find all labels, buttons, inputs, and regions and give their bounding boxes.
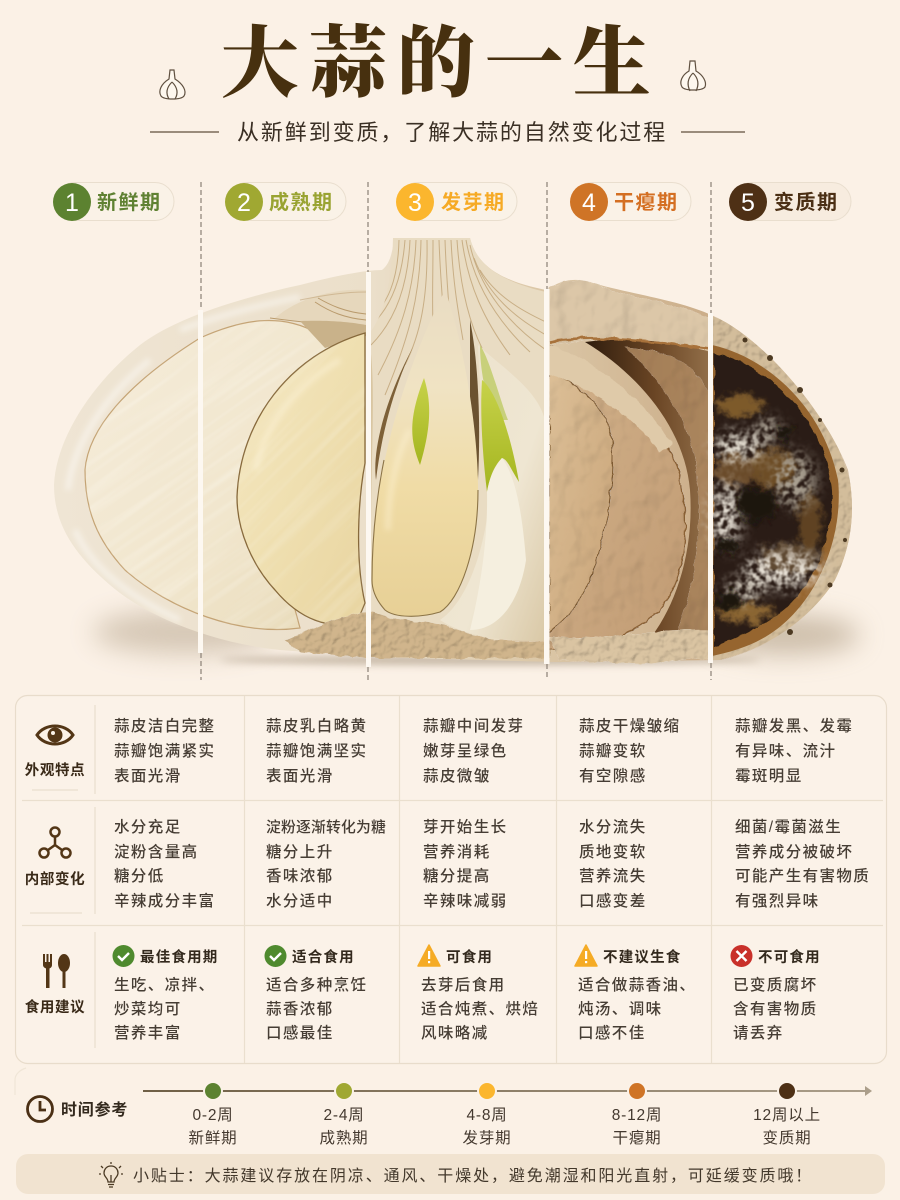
timeline label: 时间参考 xyxy=(61,1100,128,1119)
advice column 5: 含有害物质 xyxy=(733,1000,818,1018)
icon: garlic right xyxy=(681,61,706,91)
timeline point 2: 成熟期 xyxy=(320,1129,368,1147)
icon: fork and spoon xyxy=(43,954,70,988)
internal change row text: 营养成分被破坏 xyxy=(735,843,853,861)
advice column 3 xyxy=(418,945,539,1042)
timeline point 1: 0-2周 xyxy=(192,1107,234,1124)
timeline section xyxy=(15,1068,872,1147)
advice column 5: 不可食用 xyxy=(758,948,821,966)
appearance row text: 蒜皮干燥皱缩 xyxy=(579,717,680,735)
title: 大蒜的一生 xyxy=(221,20,661,107)
garlic section 2 ripe clove xyxy=(236,332,366,624)
advice column 2 xyxy=(264,945,367,1042)
internal change row text: 有强烈异味 xyxy=(735,892,820,910)
timeline point 1 xyxy=(189,1081,237,1147)
garlic outer skin xyxy=(54,238,852,662)
advice column 4: 不建议生食 xyxy=(603,948,682,966)
garlic section 5 rotten core xyxy=(713,353,832,647)
internal change row text: 水分适中 xyxy=(266,892,334,910)
stage pill 2 xyxy=(225,182,346,221)
comparison table xyxy=(16,696,886,1064)
timeline point 3 xyxy=(463,1081,511,1147)
garlic section 5 skin xyxy=(712,316,852,662)
appearance row text: 嫩芽呈绿色 xyxy=(423,742,508,760)
garlic section 1 fresh clove xyxy=(84,320,328,630)
garlic section 4 shrunken clove A xyxy=(549,372,613,632)
stage pill 4: 干瘪期 xyxy=(614,191,678,214)
advice column 1: 炒菜均可 xyxy=(114,1000,182,1018)
garlic section 4 outer band xyxy=(625,347,711,648)
stage pill 4: 4 xyxy=(582,189,596,217)
divider strip 3 xyxy=(544,289,550,664)
timeline point 2: 2-4周 xyxy=(323,1107,365,1124)
timeline point 5 xyxy=(753,1081,821,1147)
stage pill 2: 2 xyxy=(237,189,251,217)
appearance row text: 有异味、流汁 xyxy=(735,742,836,760)
advice column 1: 最佳食用期 xyxy=(140,948,218,966)
table grid xyxy=(22,696,883,1063)
appearance row text: 蒜皮洁白完整 xyxy=(114,716,215,735)
internal change row text: 淀粉逐渐转化为糖 xyxy=(266,818,386,836)
garlic section 4 ragged skin band xyxy=(549,339,711,452)
garlic base root plate xyxy=(285,612,552,658)
timeline point 5: 12周以上 xyxy=(753,1106,821,1124)
advice column 5: 请丢弃 xyxy=(733,1023,784,1042)
advice column 2: 口感最佳 xyxy=(266,1024,334,1042)
garlic section 3 sheath xyxy=(440,345,546,641)
advice column 5: 已变质腐坏 xyxy=(733,975,818,994)
appearance row text: 蒜瓣中间发芽 xyxy=(423,717,524,735)
garlic section 5 skin spots xyxy=(742,338,847,635)
internal change row text: 水分充足 xyxy=(114,818,182,836)
appearance row text: 蒜皮乳白略黄 xyxy=(266,717,367,735)
appearance row text: 蒜皮微皱 xyxy=(423,767,491,785)
internal change row text: 营养消耗 xyxy=(423,843,491,861)
sprout small xyxy=(412,378,429,465)
stage pill 3: 3 xyxy=(408,189,422,217)
stage pill 4 xyxy=(570,182,691,221)
advice column 3: 可食用 xyxy=(446,948,493,966)
appearance row text: 蒜瓣饱满坚实 xyxy=(266,741,367,760)
timeline point 2 xyxy=(320,1081,368,1147)
internal change row text: 质地变软 xyxy=(579,842,647,861)
advice column 3: 去芽后食用 xyxy=(421,975,506,994)
stage pill 5: 5 xyxy=(741,189,755,217)
row label: internal change: 内部变化 xyxy=(25,870,85,888)
garlic section 4 shrunken clove B xyxy=(549,345,686,650)
internal change row text: 口感变差 xyxy=(579,891,647,910)
advice column 2: 适合多种烹饪 xyxy=(266,975,367,994)
timeline point 4: 8-12周 xyxy=(612,1107,662,1124)
row label: appearance: 外观特点 xyxy=(25,761,85,779)
garlic clove seam xyxy=(300,321,366,348)
appearance row text: 蒜瓣饱满紧实 xyxy=(114,741,215,760)
internal change row text: 辛辣成分丰富 xyxy=(114,891,215,910)
stage pill 5 xyxy=(729,182,851,221)
advice column 4: 适合做蒜香油、 xyxy=(578,976,696,994)
tip text: 小贴士：大蒜建议存放在阴凉、通风、干燥处，避免潮湿和阳光直射，可延缓变质哦！ xyxy=(133,1167,813,1185)
timeline point 1: 新鲜期 xyxy=(189,1129,237,1147)
internal change row text: 糖分提高 xyxy=(423,867,491,885)
divider strip 1 xyxy=(198,310,203,653)
row label: eating advice: 食用建议 xyxy=(25,998,85,1016)
appearance row text: 蒜瓣发黑、发霉 xyxy=(735,717,853,735)
garlic neck fibres xyxy=(368,238,546,640)
garlic section 4 dark cavity xyxy=(585,340,711,650)
internal change row text: 可能产生有害物质 xyxy=(735,867,870,885)
appearance row text: 表面光滑 xyxy=(114,767,182,785)
garlic cross-section illustration xyxy=(0,135,860,776)
timeline point 4 xyxy=(612,1081,662,1147)
garlic section 4 base fringe xyxy=(549,630,711,664)
advice column 4: 口感不佳 xyxy=(578,1024,646,1042)
advice column 1 xyxy=(112,945,218,1042)
icon: light bulb xyxy=(99,1162,123,1187)
internal change row text: 糖分低 xyxy=(114,867,165,885)
garlic section 3 clove xyxy=(372,290,478,616)
advice column 2: 蒜香浓郁 xyxy=(266,1000,334,1018)
appearance row text: 有空隙感 xyxy=(579,766,647,785)
stage pill 2: 成熟期 xyxy=(269,190,334,214)
appearance row text: 蒜瓣变软 xyxy=(579,741,647,760)
internal change row text: 细菌/霉菌滋生 xyxy=(735,818,842,836)
stage pill 3: 发芽期 xyxy=(441,191,506,214)
stage pill 1: 1 xyxy=(65,189,79,217)
stage pill 5: 变质期 xyxy=(774,190,838,214)
advice column 1: 营养丰富 xyxy=(114,1024,182,1042)
internal change row text: 辛辣味减弱 xyxy=(423,891,508,910)
timeline point 3: 4-8周 xyxy=(466,1107,508,1124)
appearance row text: 霉斑明显 xyxy=(735,767,803,785)
stage dashed dividers xyxy=(201,182,711,680)
divider strip 2 xyxy=(366,272,371,667)
advice column 4 xyxy=(575,945,696,1042)
internal change row text: 淀粉含量高 xyxy=(114,842,199,861)
timeline arrow xyxy=(143,1086,872,1096)
garlic section 4 top skin xyxy=(549,281,711,350)
advice column 1: 生吃、凉拌、 xyxy=(114,976,215,994)
icon: eye xyxy=(37,726,73,744)
divider strip 4 xyxy=(708,313,713,663)
icon: molecule xyxy=(40,828,70,858)
timeline point 3: 发芽期 xyxy=(463,1129,511,1147)
advice column 2: 适合食用 xyxy=(292,948,355,966)
appearance row text: 表面光滑 xyxy=(266,767,334,785)
timeline point 4: 干瘪期 xyxy=(613,1129,661,1147)
stage pill 1 xyxy=(53,182,174,221)
internal change row text: 芽开始生长 xyxy=(423,818,508,836)
table frame xyxy=(16,696,886,1064)
internal change row text: 糖分上升 xyxy=(266,843,334,861)
subtitle: 从新鲜到变质，了解大蒜的自然变化过程 xyxy=(237,120,667,145)
icon: garlic left xyxy=(160,70,185,99)
garlic skin sheen xyxy=(68,297,300,620)
advice column 5 xyxy=(730,945,821,1042)
stage pill 1: 新鲜期 xyxy=(97,191,162,214)
advice column 3: 风味略减 xyxy=(421,1024,489,1042)
internal change row text xyxy=(114,818,870,910)
internal change row text: 水分流失 xyxy=(579,818,647,836)
sprout large xyxy=(470,345,526,630)
internal change row text: 香味浓郁 xyxy=(266,867,334,885)
appearance row text xyxy=(114,716,853,785)
garlic section 2 skin fold xyxy=(270,290,366,327)
timeline panel edge xyxy=(15,1068,26,1095)
internal change row text: 营养流失 xyxy=(579,867,647,885)
garlic ground shadow xyxy=(93,610,860,665)
timeline point 5: 变质期 xyxy=(763,1129,811,1147)
icon: clock xyxy=(28,1096,52,1122)
tip banner xyxy=(16,1154,885,1194)
stage pill 3 xyxy=(396,182,517,221)
advice column 3: 适合炖煮、烘焙 xyxy=(421,1000,539,1018)
advice column 4: 炖汤、调味 xyxy=(578,1000,663,1018)
